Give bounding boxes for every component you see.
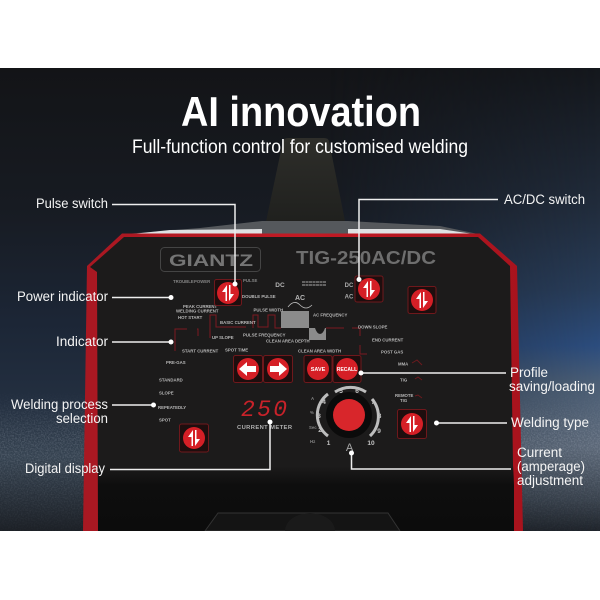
callout: profile saving/loading: saving/loading xyxy=(509,379,595,394)
panel small labels: POWER xyxy=(194,279,211,284)
panel small labels: WELDING CURRENT xyxy=(176,308,219,314)
callout: welding type: Welding type xyxy=(511,415,589,430)
panel small labels: MMA xyxy=(398,362,408,366)
panel small labels: REPEATEDLY xyxy=(158,405,186,410)
current knob with scale: 7 xyxy=(371,399,375,406)
callout: current adjustment xyxy=(349,445,585,488)
panel small labels: DOWN SLOPE xyxy=(358,324,387,330)
current knob with scale: 3 xyxy=(317,413,321,420)
callout: power indicator: Power indicator xyxy=(17,289,108,304)
title: AI innovation xyxy=(181,88,421,135)
button: AC/DC switch xyxy=(355,276,383,302)
panel small labels: POST GAS xyxy=(381,350,403,354)
panel small labels: DC xyxy=(345,283,354,289)
current knob with scale: 1 xyxy=(327,440,331,447)
panel small labels: SLOPE xyxy=(159,390,174,396)
callout: welding process selection: selection xyxy=(56,411,108,426)
callout: AC/DC switch xyxy=(356,192,585,282)
button: welding process xyxy=(180,424,208,452)
current knob with scale: 5 xyxy=(339,388,343,395)
button: pulse switch xyxy=(214,280,242,306)
button: secondary switch xyxy=(408,286,436,314)
digital display xyxy=(237,397,293,431)
current knob with scale: 2 xyxy=(318,427,322,434)
panel small labels: UP SLOPE xyxy=(212,335,234,340)
panel small labels: BASIC CURRENT xyxy=(220,320,256,325)
panel small labels: DOUBLE PULSE xyxy=(242,294,276,299)
panel small labels: TIG xyxy=(400,398,408,403)
panel small labels: CLEAN AREA WIDTH xyxy=(298,348,341,354)
panel small labels: START CURRENT xyxy=(182,348,219,354)
current knob with scale: % xyxy=(310,410,314,415)
panel small labels: AC xyxy=(345,294,354,300)
panel small labels: PEAK CURRENT xyxy=(183,304,218,309)
callout: current adjustment: Current xyxy=(517,445,562,460)
panel small labels: SPOT xyxy=(159,418,171,422)
callout: indicator xyxy=(56,334,174,349)
callout: digital display: Digital display xyxy=(25,461,105,476)
background scene xyxy=(0,68,600,531)
current knob with scale: Hz xyxy=(310,439,315,444)
callout: welding process selection xyxy=(11,397,156,426)
parameter waveform diagram: AC xyxy=(295,295,305,302)
callout: pulse switch xyxy=(36,196,238,286)
panel small labels: SPOT TIME xyxy=(225,348,248,352)
machine handle xyxy=(263,138,348,236)
panel small labels: END CURRENT xyxy=(372,338,404,342)
button: save: SAVE xyxy=(311,367,326,373)
digital display: 250 xyxy=(241,397,287,423)
panel small labels: PULSE WIDTH xyxy=(254,308,283,312)
panel small labels: PULSE xyxy=(243,278,257,283)
callout: power indicator xyxy=(17,289,174,304)
current knob with scale: 10 xyxy=(367,440,375,447)
panel small labels: STANDARD xyxy=(159,378,183,382)
panel small labels: CLEAN AREA DEPTH xyxy=(266,338,310,344)
callout: AC/DC switch: AC/DC switch xyxy=(504,192,585,207)
parameter waveform diagram xyxy=(175,282,367,354)
callout: indicator: Indicator xyxy=(56,334,109,349)
panel small labels: TROUBLE xyxy=(173,279,194,284)
button: recall: RECALL xyxy=(337,367,357,373)
callout: pulse switch: Pulse switch xyxy=(36,196,108,211)
panel small labels: TIG xyxy=(400,378,408,382)
callout: current adjustment: (amperage) xyxy=(517,459,585,474)
callout: profile saving/loading xyxy=(358,365,595,394)
panel small labels xyxy=(158,278,422,422)
current knob with scale: A xyxy=(346,442,354,454)
panel small labels: PULSE FREQUENCY xyxy=(243,332,286,338)
machine top metal edge xyxy=(122,221,480,235)
button: recall xyxy=(333,356,361,382)
panel small labels: PRE-GAS xyxy=(166,360,186,365)
callout: digital display xyxy=(25,420,272,476)
button: left arrow xyxy=(234,356,262,382)
callout: profile saving/loading: Profile xyxy=(510,365,548,380)
parameter waveform diagram: DC xyxy=(275,282,285,289)
machine body with red frame xyxy=(83,234,523,531)
current knob with scale: 6 xyxy=(355,388,359,395)
current knob with scale xyxy=(309,387,382,454)
digital display: CURRENT METER xyxy=(237,425,293,431)
front panel brand: GIANTZ xyxy=(169,251,253,270)
current knob with scale: Sec xyxy=(309,425,317,430)
button: welding type xyxy=(398,410,426,438)
current knob with scale: 4 xyxy=(322,399,326,406)
model name: TIG-250AC/DC xyxy=(296,248,436,268)
button: save xyxy=(304,356,332,382)
current knob with scale: A xyxy=(311,396,314,401)
panel small labels: REMOTE xyxy=(395,393,414,398)
callout: welding type xyxy=(434,415,589,430)
subtitle: Full-function control for customised welding xyxy=(132,137,468,158)
front panel brand xyxy=(160,248,260,272)
current knob with scale: 9 xyxy=(377,428,381,435)
button: right arrow xyxy=(264,356,292,382)
panel small labels: AC FREQUENCY xyxy=(313,312,348,318)
panel small labels: HOT START xyxy=(178,315,203,320)
callout: welding process selection: Welding process xyxy=(11,397,108,412)
callout: current adjustment: adjustment xyxy=(517,473,583,488)
current knob with scale: 8 xyxy=(378,413,382,420)
